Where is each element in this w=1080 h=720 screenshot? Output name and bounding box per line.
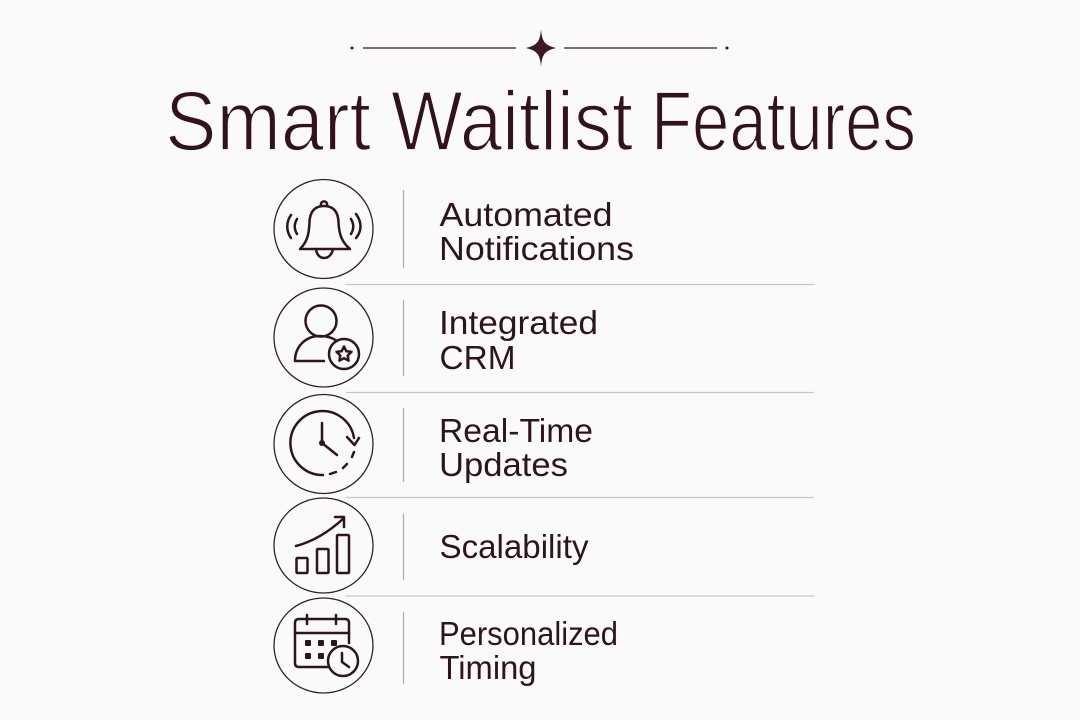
label: CRM [440,339,516,376]
title: Smart [165,74,371,168]
label [439,196,634,267]
label: Scalability [440,528,589,565]
label [439,304,598,376]
feature row: Integrated CRM [274,288,598,387]
vertical rule [402,612,404,684]
feature row: Personalized Timing [274,598,618,693]
icon: user with star badge [274,288,373,387]
vertical rule [402,514,404,580]
label: Notifications [439,230,634,267]
label: Integrated [439,304,598,341]
title [165,74,916,168]
feature row: Real-Time Updates [274,394,593,494]
row dividers [346,284,814,596]
vertical rule [402,408,404,482]
label: Updates [439,446,568,483]
vertical rule [402,300,404,376]
label: Personalized [439,615,618,652]
label: Automated [440,196,612,233]
feature row: Automated Notifications [274,180,634,278]
title: Waitlist [391,74,633,168]
label [439,412,593,483]
vertical rule [402,190,404,268]
icon: clock with arrow [274,394,373,494]
label: Timing [440,649,536,686]
feature row: Scalability [274,498,589,593]
icon: calendar with clock [274,598,373,693]
label [439,615,618,686]
icon: growth bar chart [274,498,373,593]
label: Real-Time [439,412,593,449]
title: Features [651,74,916,168]
icon: bell [274,180,373,278]
decorative title ornament [350,29,728,67]
